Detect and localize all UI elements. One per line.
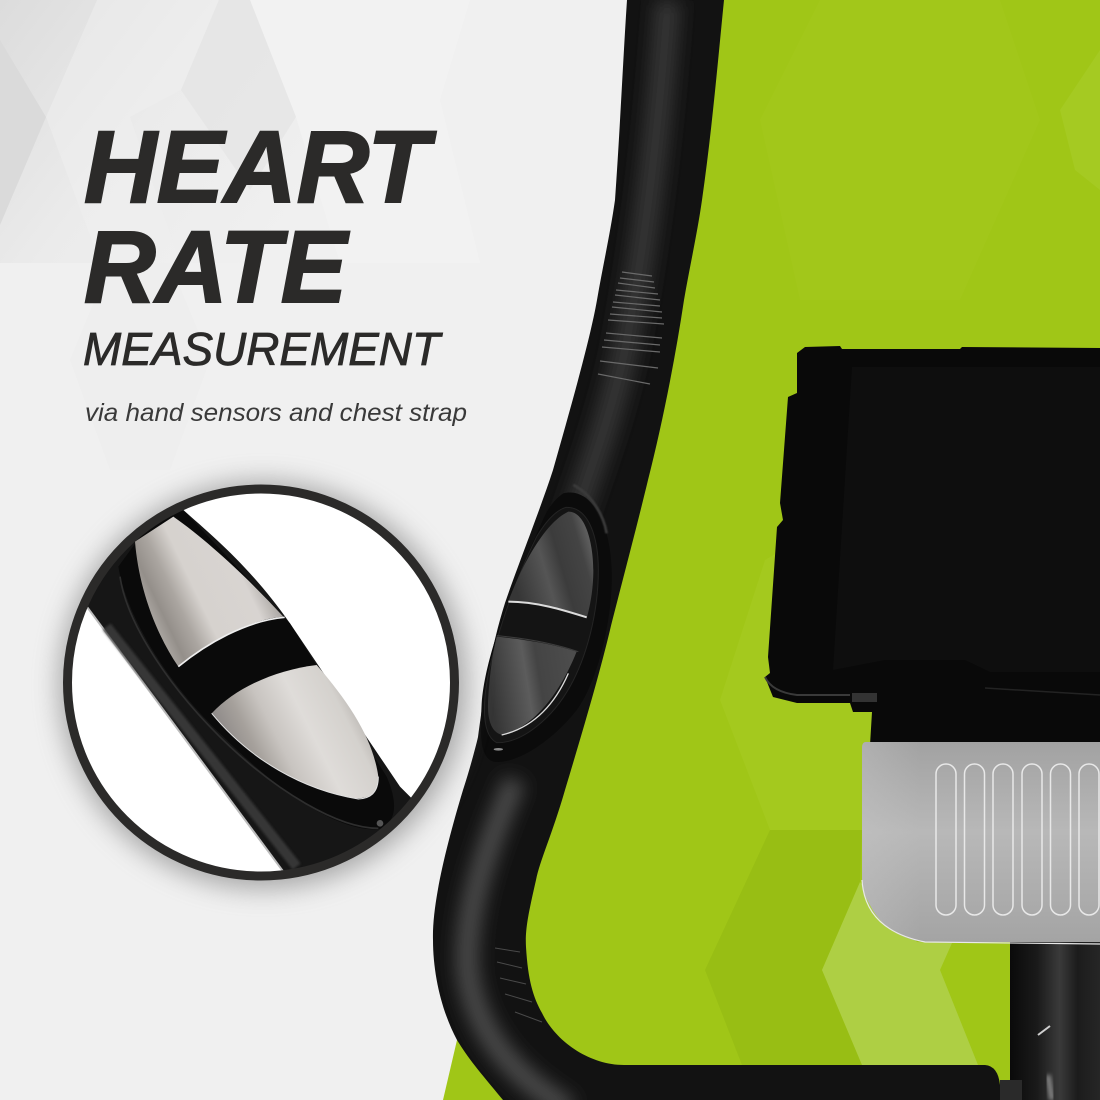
subtitle: via hand sensors and chest strap: [85, 399, 467, 427]
lower steel pad: [212, 665, 378, 798]
upper steel pad: [135, 517, 283, 667]
tablet screen: [833, 367, 1100, 672]
green background: [443, 0, 1100, 1100]
tablet holder: [765, 346, 1100, 745]
sensor housing: [118, 510, 394, 829]
handlebar tube: [80, 503, 420, 883]
console post: [1000, 938, 1100, 1100]
handlebar: [433, 0, 1000, 1100]
leather wrinkles: [598, 272, 664, 384]
panel grip ridges: [936, 764, 1099, 915]
callout ring: [68, 489, 454, 876]
title line: heart: HEART: [84, 110, 437, 224]
heart rate sensor on handlebar: [481, 485, 612, 762]
magnified sensor callout: [59, 481, 467, 889]
title line: measurement: MEASUREMENT: [83, 323, 443, 375]
silver console panel: [862, 742, 1100, 944]
title line: rate: RATE: [84, 210, 350, 324]
light chevron: [822, 882, 978, 1065]
lower steel pad: [488, 637, 577, 735]
handlebar sheen: [467, 0, 1000, 1100]
upper steel pad: [508, 512, 593, 618]
magnified detail: [80, 503, 420, 883]
title: [83, 110, 467, 427]
callout shadow: [59, 481, 467, 889]
